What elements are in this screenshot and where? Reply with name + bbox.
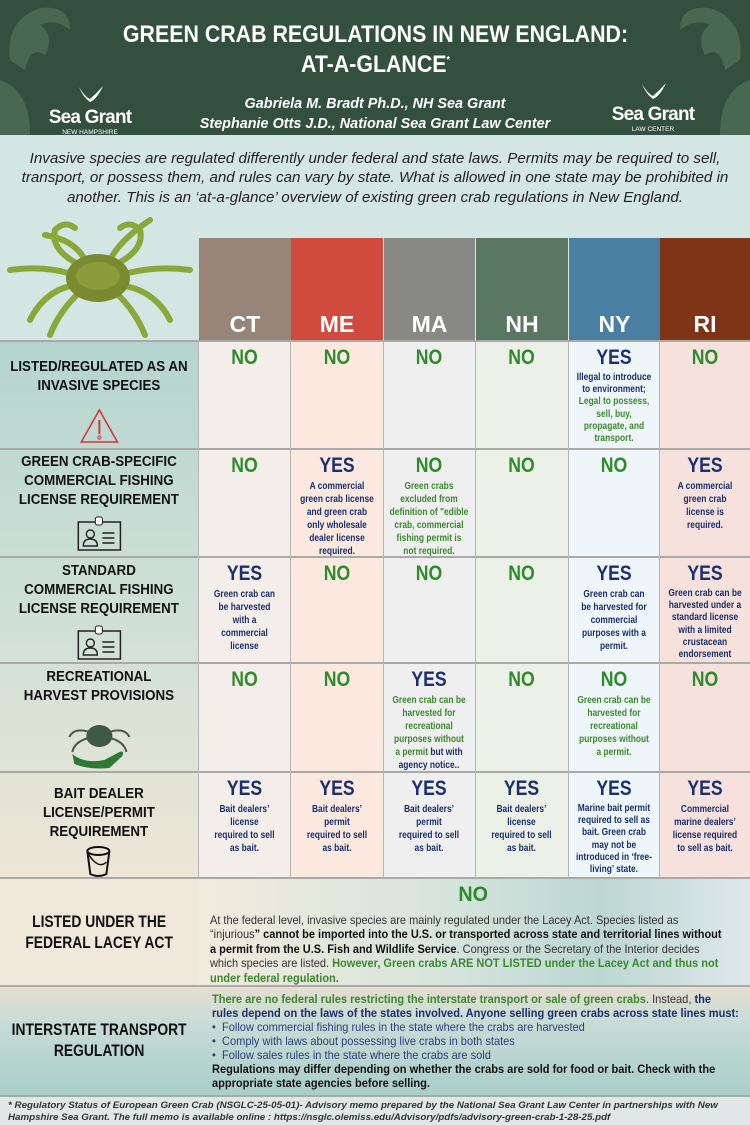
row 3 cells: harvested under a	[669, 600, 741, 611]
logo: Sea Grant New Hampshire	[49, 86, 132, 136]
row 5 cells: required to sell	[307, 830, 367, 841]
row 5 cells: YES	[596, 777, 632, 800]
row 5 cells: YES	[504, 777, 539, 800]
row 2 cells: green crab	[683, 494, 726, 505]
row 3 cells: YES	[227, 562, 262, 585]
row 1 label: listed as invasive: LISTED/REGULATED AS AN	[10, 359, 188, 375]
row 3 label: standard license	[19, 563, 179, 660]
row 4 cells: recreational	[590, 721, 638, 732]
row 3 label: standard license: LICENSE REQUIREMENT	[19, 601, 179, 617]
header: CT	[199, 238, 291, 341]
row 4 cells: recreational	[405, 721, 453, 732]
title: GREEN CRAB REGULATIONS IN NEW ENGLAND:	[123, 21, 628, 48]
icon: bucket	[86, 846, 110, 877]
row 3 label: standard license: COMMERCIAL FISHING	[24, 582, 174, 598]
header: NH	[476, 238, 568, 341]
title: AT-A-GLANCE*	[301, 51, 450, 78]
authors: Stephanie Otts J.D., National Sea Grant Law Center	[200, 115, 550, 132]
row 5 cells: license required	[673, 830, 737, 841]
row 4 label: recreational: HARVEST PROVISIONS	[24, 688, 174, 704]
row 5 cells: YES	[319, 777, 355, 800]
row 3 cells: NO	[508, 562, 535, 585]
Interstate section background	[0, 987, 750, 1095]
row 4 cells: NO	[324, 668, 350, 691]
row 5 cells: Bait dealers’	[404, 804, 454, 815]
header: CT: CT	[230, 311, 260, 337]
row 3 cells: with a limited	[678, 625, 732, 636]
logo: Sea Grant Law Center: LAW CENTER	[632, 126, 674, 133]
row 4 cells: Green crab can be	[392, 695, 466, 706]
title	[123, 21, 628, 78]
interstate content: • Follow sales rules in the state where the crabs are sold	[212, 1049, 491, 1062]
text: * Regulatory Status of European Green Crab (NSGLC-25-05-01)- Advisory memo prepared by the National Sea Grant Law Center in partnerships with New	[8, 1100, 718, 1110]
header: ME	[291, 238, 383, 341]
row 2 cells: only wholesale	[307, 520, 367, 531]
row 4 label: recreational: RECREATIONAL	[46, 669, 151, 685]
row 2 cells: required.	[687, 520, 723, 531]
label column background	[0, 341, 198, 878]
row 2 cells: excluded from	[400, 494, 458, 505]
row 1 cells: NO	[324, 346, 350, 369]
row 5 cells: bait. Green crab	[582, 827, 646, 838]
row 2 cells: NO	[508, 454, 535, 477]
row 2 cells: A commercial	[678, 481, 732, 492]
row 2 cells: YES	[687, 454, 723, 477]
icon: warning triangle	[80, 408, 119, 443]
row 5 label: bait dealer	[43, 786, 155, 877]
Lacey Act content: under federal regulation.	[210, 972, 339, 985]
intro text: another. This is an ‘at-a-glance’ overview of existing green crab regulations in New England.	[67, 190, 683, 206]
row 4 cells: YES	[411, 668, 447, 691]
Lacey Act content: At the federal level, invasive species are mainly regulated under the Lacey Act. Species listed as	[210, 914, 678, 927]
row 5 cells: Bait dealers’	[219, 804, 269, 815]
row 4 cells: a permit but with	[395, 747, 463, 758]
row 5 cells: Marine bait permit	[578, 803, 650, 814]
row 3 cells: YES	[596, 562, 632, 585]
intro text	[22, 151, 728, 206]
row 4 cells: a permit.	[596, 747, 631, 758]
row 3 cells: commercial	[221, 628, 268, 639]
intro text: transport, or possess them, and rules can vary by state. What is allowed in one state may be prohibited in	[22, 170, 728, 186]
row 1 cells: propagate, and	[584, 421, 644, 432]
Lacey answer NO: NO	[458, 883, 488, 906]
Lacey Act content	[210, 883, 722, 985]
interstate content: rules depend on the laws of the states involved. Anyone selling green crabs across state lines must: Regulations may differ depending on whether the crabs are sold for food or bait. Check with the	[212, 1007, 739, 1076]
row 1 cells: Illegal to introduce	[577, 372, 651, 383]
row 5 cells: Bait dealers’	[312, 804, 362, 815]
row 2 cells: NO	[231, 454, 258, 477]
row 5 cells: Commercial	[681, 804, 729, 815]
header: NY	[569, 238, 660, 341]
header: ME: ME	[320, 311, 354, 337]
logo: Sea Grant New Hampshire: Sea Grant	[49, 107, 131, 128]
row 2 label: crab-specific license: GREEN CRAB-SPECIFIC	[21, 454, 177, 470]
row 5 cells: as bait.	[507, 843, 536, 854]
state column backgrounds	[198, 341, 750, 878]
row 3 cells: Green crab can be	[668, 588, 742, 599]
footer note	[0, 1097, 750, 1125]
row 5 cells: required to sell	[399, 830, 459, 841]
row 4 cells: Green crab can be	[577, 695, 651, 706]
row 3 cells: purposes with a	[582, 628, 646, 639]
row 3 cells: NO	[416, 562, 442, 585]
header: RI	[660, 238, 750, 341]
row 1 label: listed as invasive: INVASIVE SPECIES	[37, 378, 160, 394]
row 5 cells: as bait.	[414, 843, 443, 854]
row 3 cells: with a	[233, 615, 256, 626]
row 4 cells: purposes without	[579, 734, 649, 745]
icon: green crab illustration	[7, 217, 193, 338]
column headers	[199, 238, 750, 340]
row 5 cells: may not be	[592, 840, 636, 851]
row 5 cells	[214, 777, 737, 875]
header: MA: MA	[412, 311, 447, 337]
logo: Sea Grant New Hampshire: NEW HAMPSHIRE	[62, 129, 118, 136]
row 2 cells: A commercial	[310, 481, 364, 492]
row 5 cells: license	[230, 817, 259, 828]
row 5 cells: YES	[411, 777, 447, 800]
row 5 cells: YES	[687, 777, 723, 800]
row 5 cells: permit	[324, 817, 350, 828]
row 1 cells: to environment;	[582, 384, 646, 395]
Lacey Act label: FEDERAL LACEY ACT	[25, 934, 173, 952]
row 2 label: crab-specific license: COMMERCIAL FISHING	[24, 473, 174, 489]
row 3 cells: Green crab can	[583, 589, 645, 600]
row 3 cells: be harvested for	[581, 602, 647, 613]
row 5 cells: living’ state.	[590, 864, 638, 875]
row 2 cells: NO	[416, 454, 442, 477]
row 1 cells	[231, 346, 718, 444]
row 2 cells: crab, commercial	[394, 520, 464, 531]
row 3 cells	[214, 562, 742, 660]
row 5 label: bait dealer: BAIT DEALER	[54, 786, 144, 802]
row 5 cells: permit	[416, 817, 442, 828]
header banner	[0, 0, 750, 135]
authors	[200, 95, 551, 132]
row 3 cells: endorsement	[679, 649, 731, 660]
row 2 cells: YES	[319, 454, 355, 477]
row 2 cells: definition of "edible	[390, 507, 468, 518]
row 3 cells: permit.	[600, 641, 628, 652]
row 1 cells: Legal to possess,	[579, 396, 649, 407]
Lacey Act label	[25, 913, 173, 952]
row 2 cells	[231, 454, 732, 557]
row 3 cells: be harvested	[219, 602, 270, 613]
row 4 cells: harvested for	[402, 708, 456, 719]
row 1 cells: NO	[692, 346, 718, 369]
row 2 cells: required.	[319, 546, 355, 557]
row 3 cells: YES	[687, 562, 723, 585]
logo: Sea Grant Law Center: Sea Grant	[612, 104, 694, 125]
row 5 cells: required to sell	[491, 830, 552, 841]
icon: crab in hand	[68, 725, 130, 768]
authors: Gabriela M. Bradt Ph.D., NH Sea Grant	[245, 95, 505, 112]
row 3 cells: crustacean	[683, 637, 727, 648]
logo: Sea Grant Law Center	[612, 83, 695, 133]
row 1 cells: NO	[508, 346, 535, 369]
row 5 cells: as bait.	[230, 843, 259, 854]
row 4 cells: harvested for	[587, 708, 641, 719]
interstate content: • Follow commercial fishing rules in the state where the crabs are harvested	[212, 1021, 585, 1034]
row 2 cells: green crab license	[300, 494, 374, 505]
row 4 cells: NO	[601, 668, 627, 691]
row 1 cells: NO	[416, 346, 442, 369]
row 1 label: listed as invasive	[10, 359, 188, 443]
row 2 cells: dealer license	[309, 533, 365, 544]
interstate content: appropriate state agencies before selling.	[212, 1077, 430, 1090]
header: NH: NH	[505, 311, 539, 337]
Lacey Act label: LISTED UNDER THE	[32, 913, 166, 931]
Lacey Act content: a permit from the U.S. Fish and Wildlife Service. Congress or the Secretary of the Interior decides	[210, 943, 700, 956]
row 4 cells: purposes without	[394, 734, 464, 745]
row 4 cells: NO	[231, 668, 258, 691]
row 4 cells	[231, 668, 718, 771]
decorative crab claws	[0, 8, 750, 135]
row 3 label: standard license: STANDARD	[62, 563, 136, 579]
header: RI: RI	[694, 311, 716, 337]
icon: id badge	[78, 516, 122, 551]
text: Hampshire Sea Grant. The full memo is available online : https://nsglc.olemiss.edu/Advisory/pdfs/advisory-green-crab-1-28-25.pdf	[8, 1112, 610, 1122]
row 1 cells: transport.	[594, 433, 634, 444]
row 5 cells: required to sell as	[578, 815, 650, 826]
interstate content: There are no federal rules restricting the interstate transport or sale of green crabs. Instead, the	[212, 993, 711, 1006]
row 2 label: crab-specific license: LICENSE REQUIREMENT	[19, 492, 179, 508]
row 4 cells: NO	[508, 668, 535, 691]
row 3 cells: commercial	[591, 615, 637, 626]
row 5 label: bait dealer: LICENSE/PERMIT	[43, 805, 155, 821]
row 3 cells: license	[230, 641, 259, 652]
interstate label: REGULATION	[54, 1042, 144, 1060]
row 2 cells: NO	[601, 454, 627, 477]
interstate content: • Comply with laws about possessing live crabs in both states	[212, 1035, 515, 1048]
row 5 cells: as bait.	[322, 843, 351, 854]
row 2 label: crab-specific license	[19, 454, 179, 551]
row 5 label: bait dealer: REQUIREMENT	[50, 824, 148, 840]
row 5 cells: required to sell	[214, 830, 275, 841]
icon: id badge	[78, 626, 122, 660]
interstate label	[12, 1021, 187, 1060]
row 5 cells: introduced in ‘free-	[576, 852, 652, 863]
row 2 cells: license is	[686, 507, 724, 518]
row 5 cells: to sell as bait.	[677, 843, 733, 854]
row 5 cells: marine dealers’	[674, 817, 736, 828]
row 3 cells: Green crab can	[214, 589, 275, 600]
row 2 cells: not required.	[403, 546, 455, 557]
Lacey Act content: “injurious” cannot be imported into the U.S. or transported across state and territorial lines without	[210, 928, 722, 941]
row 1 cells: sell, buy,	[596, 409, 632, 420]
row 5 cells: Bait dealers’	[496, 804, 546, 815]
Lacey Act section background	[0, 879, 750, 985]
row 5 cells: YES	[227, 777, 262, 800]
row 2 cells: and green crab	[307, 507, 367, 518]
row 4 label: recreational	[24, 669, 174, 768]
Lacey Act content: which species are listed. However, Green crabs ARE NOT LISTED under the Lacey Act and thus not	[210, 957, 718, 970]
intro text: Invasive species are regulated differently under federal and state laws. Permits may be required to sell,	[30, 151, 720, 167]
row 3 cells: NO	[324, 562, 350, 585]
row 5 cells: license	[507, 817, 536, 828]
row 4 cells: agency notice..	[399, 760, 459, 771]
row 1 cells: NO	[231, 346, 258, 369]
row 1 cells: YES	[596, 346, 632, 369]
row 4 cells: NO	[692, 668, 718, 691]
row 2 cells: fishing permit is	[397, 533, 461, 544]
header: MA	[384, 238, 475, 341]
interstate label: INTERSTATE TRANSPORT	[12, 1021, 187, 1039]
row 2 cells: Green crabs	[404, 481, 453, 492]
header: NY: NY	[599, 311, 630, 337]
row 3 cells: standard license	[672, 612, 738, 623]
